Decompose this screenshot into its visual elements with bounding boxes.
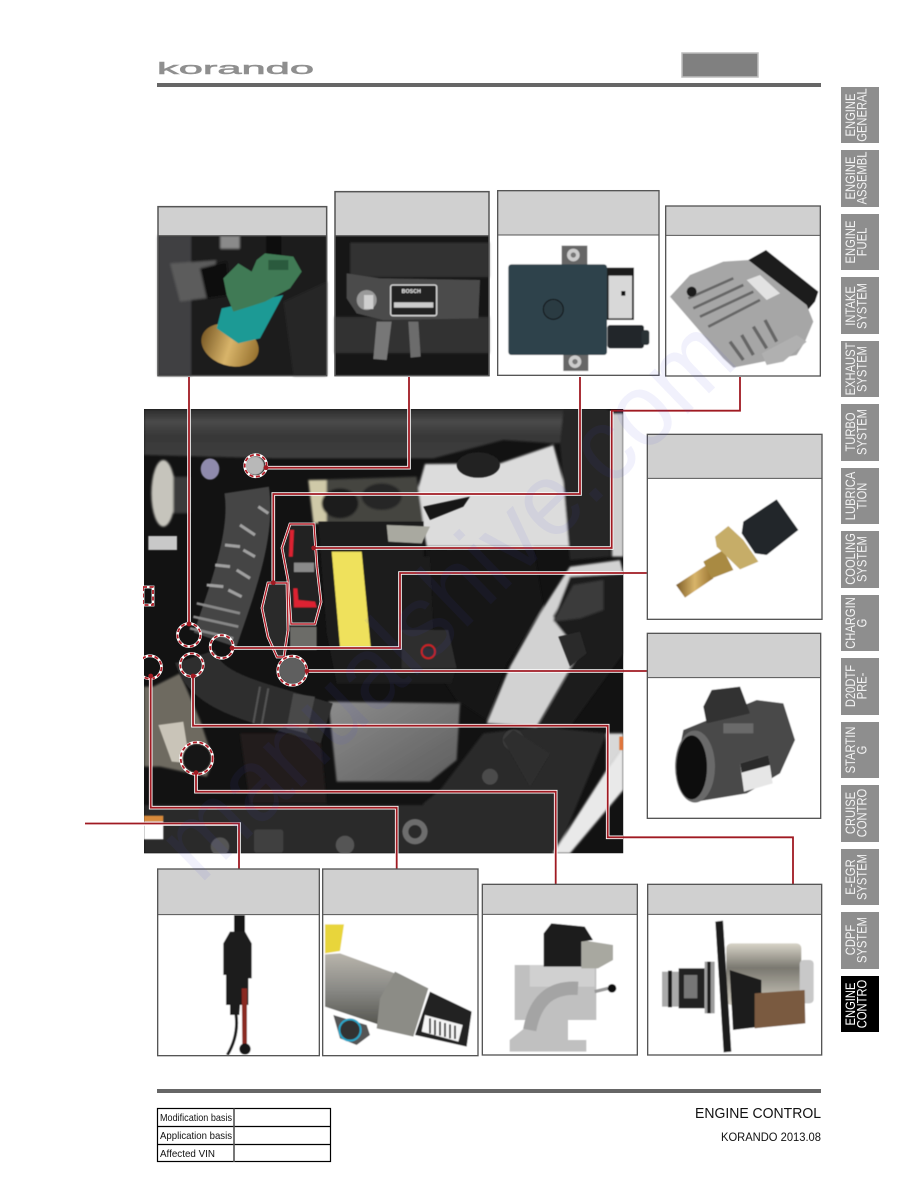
tab: cdpf system: SYSTEM	[854, 917, 870, 963]
photo: air intake hose	[215, 490, 248, 640]
tab: engine general	[841, 87, 879, 143]
tab: intake system: SYSTEM	[854, 283, 870, 329]
panel 5 frame and header	[647, 434, 822, 619]
photo: coolant tank area	[308, 477, 423, 523]
tab: engine control (active): CONTRO	[854, 980, 870, 1028]
photo: white bumper wedge	[553, 747, 623, 853]
tab: lubrication: TION	[854, 483, 870, 509]
panel 9: EGR valve photo	[482, 914, 637, 1055]
photo: battery terminal	[387, 525, 430, 543]
red leader lines and target markers	[138, 455, 321, 774]
panel: EGR valve and imv valve	[482, 884, 822, 1055]
photo: yellow battery label	[332, 552, 371, 647]
photo: grey engine label	[148, 536, 177, 550]
tab: starting: STARTIN	[843, 727, 858, 773]
marker: dashed circles	[138, 455, 307, 774]
panel: glow control unit and ECU	[498, 191, 820, 376]
tab: charging	[841, 595, 879, 651]
tab: engine fuel: FUEL	[854, 228, 870, 256]
photo: relay units	[284, 526, 320, 622]
markers: relay outlines	[262, 524, 321, 657]
panel 3 frame and header	[498, 191, 659, 375]
footer: modification table: Modification basis	[160, 1112, 232, 1124]
tab: starting	[841, 722, 879, 778]
tab: engine control (active): ENGINE	[843, 983, 858, 1025]
photo: bolts	[503, 729, 524, 751]
photo: battery	[318, 522, 457, 683]
tab: cruise control: CRUISE	[843, 792, 858, 834]
footer: model and date: KORANDO 2013.08	[721, 1132, 821, 1144]
tab: lubrication	[841, 468, 879, 524]
tab: engine assembly: ASSEMBL	[854, 152, 870, 204]
tab: intake system	[841, 277, 879, 334]
photo: turbo housing	[151, 460, 175, 527]
panel 5: coolant temperature sensor photo	[647, 478, 822, 619]
tab: cooling system	[841, 531, 879, 588]
tab: cooling system: COOLING	[843, 533, 858, 585]
tab: D20DTF: PRE-	[854, 673, 870, 699]
panel 7: wiring connector photo	[158, 915, 319, 1056]
footer rule	[157, 1089, 821, 1093]
tab: engine fuel	[841, 214, 879, 270]
tab: exhaust system: EXHAUST	[843, 342, 858, 395]
photo: right side bracket	[537, 573, 623, 730]
photo: EGR metal body	[144, 673, 213, 777]
photo: battery red terminal cover	[402, 630, 457, 668]
footer: modification table: Application basis	[160, 1130, 232, 1142]
side navigation tabs	[841, 87, 879, 1032]
panel 2: DPF differential pressure sensor photo: BOSCH	[402, 289, 421, 295]
tab: e-egr system: SYSTEM	[854, 854, 870, 900]
panel 9 frame and header	[482, 884, 637, 1055]
tab: charging: CHARGIN	[843, 597, 858, 649]
panel 4: engine ECU photo	[666, 235, 820, 376]
panel 10 frame and header	[648, 884, 822, 1055]
panel: wiring connector and rail pressure sensor	[158, 869, 478, 1056]
photo: right fender dark pillar	[560, 410, 610, 560]
tab: lubrication: LUBRICA	[843, 471, 858, 520]
tab: turbo system: TURBO	[843, 412, 858, 452]
footer: section title: ENGINE CONTROL	[695, 1106, 821, 1122]
photo: lower hose	[240, 733, 327, 803]
tab: engine fuel: ENGINE	[843, 221, 858, 263]
leader lines	[85, 377, 793, 884]
panel 1: temperature switch photo	[158, 236, 327, 376]
footer: modification table: Affected VIN	[160, 1148, 215, 1160]
panel 8 frame and header	[323, 869, 478, 1056]
leader line: white halo on photo	[143, 408, 623, 854]
photo: air cleaner box	[328, 702, 460, 782]
tab: charging: G	[854, 619, 870, 627]
panel 2: DPF differential pressure sensor photo	[335, 236, 489, 376]
photo: white fender strip	[487, 560, 623, 727]
tab: engine assembly	[841, 150, 879, 207]
panel 4 frame and header	[666, 206, 820, 376]
panel 6: mass air flow sensor photo	[647, 678, 821, 818]
panel 10: fuel metering valve photo	[648, 914, 822, 1055]
photo: intake duct	[195, 657, 327, 723]
tab: cruise control: CONTRO	[854, 789, 870, 837]
photo: orange and white marker	[144, 816, 163, 822]
photo: white connector	[158, 722, 190, 763]
panel 7 frame and header	[158, 869, 319, 1056]
tab: exhaust system: SYSTEM	[854, 346, 870, 392]
panel 6 frame and header	[647, 633, 821, 818]
panel: coolant sensor connector and pressure sensor	[158, 192, 489, 376]
tab: e-egr system: E-EGR	[843, 859, 858, 895]
engine bay photo	[144, 409, 623, 856]
photo: radiator support	[144, 805, 431, 853]
photo: fabric pad	[458, 546, 544, 720]
tab: cdpf system	[841, 912, 879, 969]
tab: engine control (active)	[841, 976, 879, 1032]
header: korando logo: korando	[157, 59, 314, 78]
panel 3: glow plug control unit photo	[498, 235, 659, 375]
tab: engine general: GENERAL	[854, 88, 870, 142]
panel 1 frame and header	[158, 207, 327, 376]
tab: cdpf system: CDPF	[843, 925, 858, 955]
photo: light strip at edge	[612, 413, 623, 557]
watermark: manualshive.com	[135, 295, 757, 902]
header rule	[157, 83, 821, 87]
panel 2 frame and header	[335, 192, 489, 376]
tab: turbo system: SYSTEM	[854, 409, 870, 455]
tab: turbo system	[841, 404, 879, 461]
panel 8: rail pressure sensor photo	[323, 915, 478, 1056]
footer: modification table	[158, 1108, 330, 1162]
tab: engine assembly: ENGINE	[843, 157, 858, 199]
tab: exhaust system	[841, 341, 879, 397]
header: grey section box	[682, 53, 758, 77]
photo: white fender apron	[417, 445, 570, 547]
tab: intake system: INTAKE	[843, 286, 858, 326]
photo: purple filter	[201, 458, 219, 480]
tab: starting: G	[854, 746, 870, 754]
tab: e-egr system	[841, 849, 879, 905]
photo: hood cross member	[144, 409, 607, 458]
tab: D20DTF: D20DTF	[843, 665, 858, 707]
panel: coolant temperature sensor and air flow sensor	[647, 434, 822, 818]
tab: cruise control	[841, 785, 879, 842]
tab: engine general: ENGINE	[843, 94, 858, 136]
tab: D20DTF	[841, 658, 879, 715]
photo: lower right black panel	[423, 727, 607, 853]
tab: cooling system: SYSTEM	[854, 536, 870, 582]
